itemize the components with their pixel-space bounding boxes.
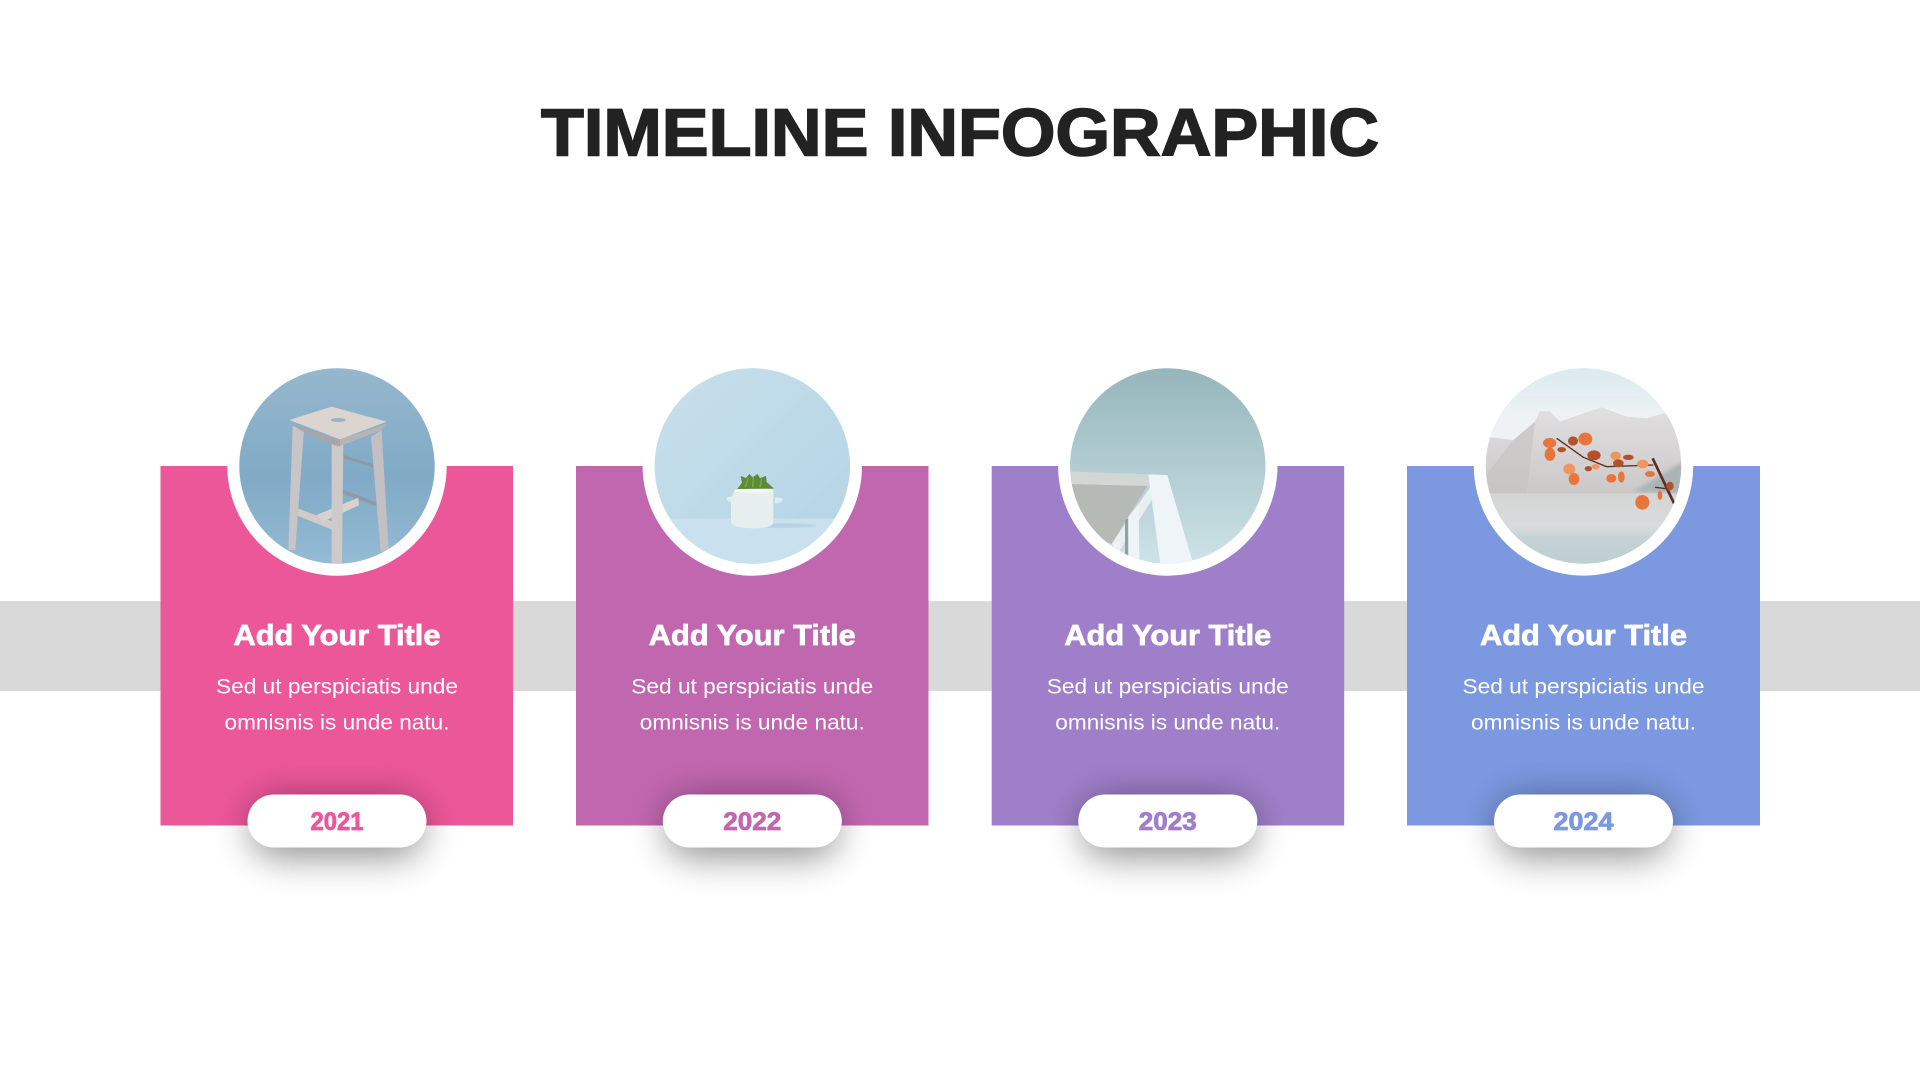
description: omnisnis is unde natu.	[1055, 712, 1280, 734]
description: omnisnis is unde natu.	[1471, 712, 1696, 734]
year pill	[248, 794, 426, 848]
panel: 2021	[160, 360, 513, 858]
timeline band	[0, 601, 1920, 691]
card background	[160, 466, 513, 826]
photo: autumn branch	[1486, 368, 1682, 564]
heading: Add Your Title	[1480, 620, 1687, 652]
description: Sed ut perspiciatis unde	[1462, 676, 1704, 698]
timeline infographic	[0, 108, 1920, 882]
description: omnisnis is unde natu.	[224, 712, 450, 734]
card background	[1407, 466, 1760, 826]
panel: 2023	[992, 360, 1344, 858]
pill shadow	[665, 798, 839, 858]
white ring	[1058, 466, 1278, 576]
year pill	[1078, 794, 1257, 848]
pill shadow	[1496, 798, 1670, 858]
heading: Add Your Title	[234, 620, 440, 652]
year pill: 2023	[1139, 808, 1197, 836]
pill shadow	[250, 798, 424, 858]
card background	[576, 466, 928, 826]
year pill: 2021	[310, 808, 364, 836]
description: Sed ut perspiciatis unde	[1047, 676, 1289, 698]
white ring	[1474, 466, 1693, 576]
photo: potted plant	[654, 368, 850, 564]
heading: Add Your Title	[1064, 620, 1271, 652]
year pill	[1494, 794, 1673, 848]
description	[1047, 676, 1289, 734]
description	[631, 676, 873, 734]
year pill: 2022	[723, 808, 781, 836]
panel: 2024	[1407, 360, 1760, 858]
white ring	[643, 466, 862, 576]
description	[1462, 676, 1704, 734]
year pill	[663, 794, 842, 848]
photo: stool	[239, 368, 435, 564]
panel: 2022	[576, 360, 928, 858]
year pill: 2024	[1554, 808, 1614, 836]
pill shadow	[1081, 798, 1255, 858]
heading: Add Your Title	[649, 620, 856, 652]
photo: building	[1070, 368, 1266, 564]
description	[216, 676, 458, 734]
card background	[992, 466, 1344, 826]
white ring	[227, 466, 447, 576]
description: Sed ut perspiciatis unde	[631, 676, 873, 698]
title: TIMELINE INFOGRAPHIC	[541, 96, 1379, 170]
description: omnisnis is unde natu.	[640, 712, 865, 734]
description: Sed ut perspiciatis unde	[216, 676, 458, 698]
